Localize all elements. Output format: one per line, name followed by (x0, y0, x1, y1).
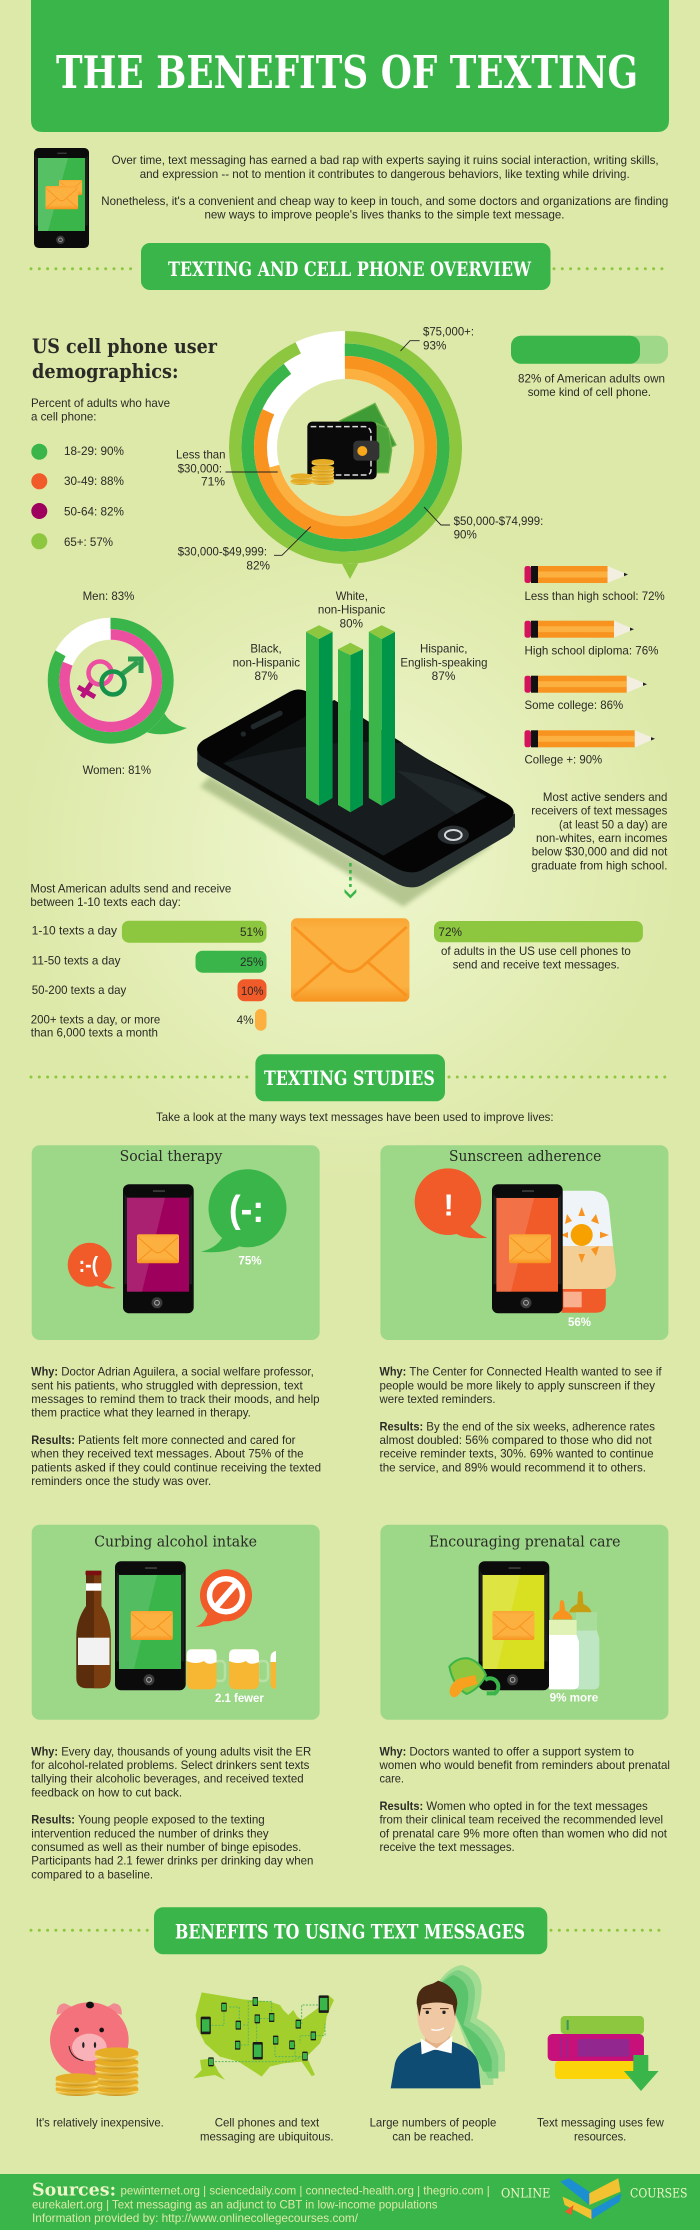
bar chart: texts per day: 4% (237, 1014, 254, 1027)
bar chart: texts per day: 25% (240, 956, 263, 969)
bar: 72% use texts: send and receive text messages. (453, 959, 620, 972)
legend: 18-29: 90% (64, 445, 124, 458)
title banner (31, 0, 669, 132)
callout: less than $30,000 (176, 448, 278, 489)
text: most adults send: Most American adults send and receive (30, 882, 231, 895)
caption: reach (370, 2117, 496, 2143)
text block: most active texters: non-whites, earn incomes (536, 832, 668, 845)
logo: online courses: COURSES (630, 2186, 688, 2201)
bar chart: texts per day: than 6,000 texts a month (31, 1027, 158, 1040)
section heading: benefits (154, 1907, 547, 1954)
sources text: pewinternet.org | sciencedaily.com | connected-health.org | thegrio.com | (120, 2185, 490, 2198)
panel: curbing alcohol intake: 2.1 fewer (215, 1692, 264, 1705)
pencil: high school diploma: High school diploma: 76% (524, 645, 658, 658)
panel: encouraging prenatal care (380, 1525, 668, 1720)
panel: sunscreen adherence: Sunscreen adherence (449, 1149, 601, 1165)
callout: $50,000-$74,999: $50,000-$74,999: (454, 515, 543, 528)
text: alcohol: consumed as well as their number of binge episodes. (31, 1841, 301, 1854)
label: white: White, (336, 590, 368, 603)
text: social therapy: them practice what they learned in therapy. (31, 1407, 251, 1420)
text: alcohol: intervention reduced the number of drinks they (31, 1827, 269, 1840)
caption: resources: resources. (574, 2130, 626, 2143)
caption: inexpensive: It's relatively inexpensive. (36, 2117, 164, 2130)
callout: $75,000+: $75,000+: (423, 326, 474, 339)
panel: encouraging prenatal care: 9% more (550, 1691, 599, 1704)
text: alcohol: for alcohol-related problems. Select drinkers sent texts (31, 1759, 310, 1772)
chart: income donut (235, 337, 456, 579)
text: alcohol (31, 1745, 313, 1881)
icon: large envelope (291, 918, 409, 1002)
caption: reach: Large numbers of people (370, 2117, 496, 2130)
text: sunscreen: receive reminder texts, 30%. 69% wanted to continue (380, 1448, 654, 1461)
icon: piggy bank (50, 2002, 138, 2096)
panel: social therapy: 75% (238, 1255, 262, 1268)
bar chart: texts per day: 11-50 texts a day (32, 955, 121, 968)
label: women: Women: 81% (83, 764, 151, 777)
panel: curbing alcohol intake: Curbing alcohol intake (94, 1535, 257, 1551)
text: sunscreen: The Center for Connected Health wanted to see if (409, 1366, 662, 1379)
text: alcohol: compared to a baseline. (31, 1868, 153, 1881)
panel: sunscreen adherence: 56% (568, 1316, 591, 1329)
heading: demographics: demographics: (32, 360, 178, 383)
legend: 50-64: 82% (64, 506, 124, 519)
text: social therapy: Patients felt more connected and cared for (78, 1434, 296, 1447)
heading: demographics (32, 335, 218, 383)
caption: resources (537, 2117, 664, 2143)
text block: most active texters: (at least 50 a day) are (559, 818, 667, 831)
text: prenatal: of prenatal care 9% more often than women who did not (380, 1827, 668, 1840)
arrow: phone to envelope (344, 863, 356, 898)
bar chart: texts per day: 50-200 texts a day (32, 984, 126, 997)
bar: 72% use texts: of adults in the US use cell phones to (441, 945, 631, 958)
demographics intro: a cell phone: (31, 411, 96, 424)
text: prenatal: receive the text messages. (380, 1841, 515, 1854)
pencil: high school diploma (524, 621, 658, 658)
text: social therapy: Results: (31, 1434, 75, 1447)
label: hispanic: English-speaking (400, 656, 488, 669)
text: sunscreen: people would be more likely to apply sunscreen if they (380, 1379, 655, 1392)
text: social therapy: Why: (31, 1366, 58, 1379)
intro text: and expression -- not to mention it contributes to dangerous behaviors, like texting while driving. (140, 168, 630, 181)
section heading: texting studies: TEXTING STUDIES (264, 1067, 435, 1090)
bar: 82% own cell phone: 82% of American adults own (518, 372, 665, 385)
label: men: Men: 83% (83, 590, 134, 603)
bar chart: texts per day: 51% (240, 926, 263, 939)
text: social therapy: messages to remind them to track their moods, and help (31, 1393, 320, 1406)
bar: 82% own cell phone: some kind of cell phone. (528, 386, 651, 399)
icon: no drinking bubble (196, 1569, 252, 1627)
bar: 72% use texts (434, 921, 643, 972)
section heading: overview: TEXTING AND CELL PHONE OVERVIEW (168, 258, 532, 281)
text: prenatal: Results: (380, 1800, 423, 1813)
pencil: less than high school (524, 566, 665, 603)
text: prenatal (379, 1745, 670, 1854)
label: black: 87% (254, 670, 278, 683)
pencil: some college: Some college: 86% (524, 699, 623, 712)
text: social therapy: sent his patients, who struggled with depression, text (31, 1379, 303, 1392)
icon: books with down arrow (548, 2016, 659, 2091)
icon: bottle (76, 1571, 111, 1688)
heading: demographics: US cell phone user (32, 335, 218, 358)
icon: sad bubble: :-( (79, 1252, 99, 1277)
callout: $30,000-$49,999: $30,000-$49,999: (178, 546, 267, 559)
icon: baby bottles and pacifier (449, 1591, 599, 1697)
intro text (101, 154, 668, 222)
text: sunscreen: By the end of the six weeks, adherence rates (426, 1420, 655, 1433)
legend: 65+: 57% (64, 536, 113, 549)
label: black: non-Hispanic (233, 656, 300, 669)
text: sunscreen (379, 1366, 662, 1474)
pencil: less than high school: Less than high school: 72% (524, 590, 665, 603)
text: most adults send (30, 882, 231, 909)
label: hispanic (400, 643, 488, 683)
icon: happy bubble: (-: (229, 1189, 264, 1231)
callout: $30,000-$49,999: 82% (246, 559, 270, 572)
sources text: Information provided by: http://www.onlinecollegecourses.com/ (32, 2212, 359, 2225)
caption: reach: can be reached. (392, 2130, 474, 2143)
pencil: college plus (524, 730, 655, 767)
text: social therapy: Doctor Adrian Aguilera, a social welfare professor, (61, 1366, 314, 1379)
bar: 82% own cell phone (511, 336, 668, 399)
caption: resources: Text messaging uses few (537, 2117, 664, 2130)
callout: $75,000+ (400, 326, 474, 352)
studies intro: Take a look at the many ways text messages have been used to improve lives: (156, 1111, 554, 1124)
footer (0, 2174, 700, 2230)
text: social therapy (30, 1366, 321, 1488)
intro text: Nonetheless, it's a convenient and cheap way to keep in touch, and some doctors and organizations are finding (101, 195, 668, 208)
bar chart: texts per day: 10% (241, 985, 263, 998)
text: prenatal: Doctors wanted to offer a support system to (409, 1745, 634, 1758)
large phone (197, 690, 515, 907)
legend (31, 444, 124, 549)
bar chart: texts per day: 1-10 texts a day (32, 924, 117, 937)
demographics intro (31, 397, 170, 424)
caption: ubiquitous (200, 2117, 334, 2143)
text: alcohol: tallying their alcoholic beverages, and received texted (31, 1773, 304, 1786)
icon: phone with envelope (123, 1184, 194, 1313)
sources text: eurekalert.org | Text messaging as an adjunct to CBT in low-income populations (32, 2198, 438, 2211)
caption: ubiquitous: Cell phones and text (215, 2117, 320, 2130)
text: sunscreen: Results: (380, 1420, 423, 1433)
logo: online courses: ONLINE (501, 2186, 550, 2201)
label: white: 80% (340, 617, 363, 630)
text: prenatal: Why: (380, 1745, 406, 1758)
text: alcohol: Why: (31, 1745, 58, 1758)
label: black: Black, (250, 643, 282, 656)
icon: wallet with money and coins (291, 403, 396, 485)
icon: gender symbols (78, 659, 141, 697)
bar: 72% use texts: 72% (438, 926, 462, 939)
text: prenatal: care. (380, 1773, 404, 1786)
panel: encouraging prenatal care: Encouraging prenatal care (429, 1535, 620, 1551)
legend: 30-49: 88% (64, 475, 124, 488)
sources heading: Sources: (32, 2180, 116, 2201)
text block: most active texters (531, 791, 668, 872)
label: hispanic: 87% (432, 670, 455, 683)
panel: sunscreen adherence (380, 1145, 668, 1340)
text: alcohol: Results: (31, 1814, 75, 1827)
text: prenatal: from their clinical team received the recommended level (380, 1814, 663, 1827)
callout: less than $30,000: Less than (176, 448, 226, 461)
text: prenatal: women who would benefit from reminders about prenatal (379, 1759, 670, 1772)
text: social therapy: reminders once the study was over. (31, 1475, 211, 1488)
text: alcohol: Participants had 2.1 fewer drinks per drinking day when (31, 1855, 313, 1868)
text: prenatal: Women who opted in for the text messages (426, 1800, 648, 1813)
icon: phone with envelope (115, 1561, 186, 1690)
icon: alert bubble (415, 1168, 488, 1238)
label: black (233, 643, 300, 683)
pencil: some college (524, 676, 647, 712)
icon: happy bubble (201, 1169, 286, 1252)
text: alcohol: feedback on how to cut back. (31, 1786, 182, 1799)
sources text (32, 2185, 490, 2225)
text: sunscreen: were texted reminders. (379, 1393, 496, 1406)
intro text: Over time, text messaging has earned a bad rap with experts saying it ruins social interaction, writing skills, (112, 154, 659, 167)
callout: $50,000-$74,999: 90% (454, 529, 477, 542)
callout: $50,000-$74,999 (424, 507, 543, 542)
text: alcohol: Young people exposed to the texting (78, 1814, 265, 1827)
label: hispanic: Hispanic, (420, 643, 467, 656)
logo: online courses (501, 2178, 688, 2219)
callout: $30,000-$49,999 (178, 527, 311, 572)
icon: phone with envelopes (34, 148, 89, 248)
section heading: benefits: BENEFITS TO USING TEXT MESSAGES (175, 1920, 525, 1943)
text: most adults send: between 1-10 texts each day: (30, 896, 181, 909)
panel: social therapy (32, 1145, 320, 1340)
text block: most active texters: Most active senders and (543, 791, 667, 804)
icon: phone with envelope (479, 1561, 549, 1690)
text: sunscreen: Why: (380, 1366, 406, 1379)
icon: sunscreen bottle (561, 1191, 616, 1313)
text: social therapy: patients asked if they could continue receiving the texted (31, 1461, 321, 1474)
bar chart: texts per day (31, 921, 266, 1040)
callout: less than $30,000: $30,000: (178, 462, 222, 475)
text: sunscreen: the service, and 89% would recommend it to others. (380, 1461, 646, 1474)
text: alcohol: Every day, thousands of young adults visit the ER (61, 1745, 311, 1758)
label: white: non-Hispanic (318, 604, 385, 617)
pencil: college plus: College +: 90% (524, 754, 602, 767)
icon: person with layered shadows (391, 1965, 505, 2088)
chart: gender donut (53, 624, 187, 738)
caption: ubiquitous: messaging are ubiquitous. (200, 2130, 334, 2143)
bar chart: texts per day: 200+ texts a day, or more (31, 1013, 160, 1026)
icon: beer mugs (187, 1649, 276, 1689)
text block: most active texters: below $30,000 and did not (532, 846, 668, 859)
callout: less than $30,000: 71% (201, 476, 225, 489)
chart: ethnicity 3D bars (306, 625, 395, 812)
icon: US map with phones (193, 1992, 334, 2080)
section heading: overview (141, 243, 550, 290)
text block: most active texters: receivers of text messages (531, 805, 668, 818)
text block: most active texters: graduate from high school. (531, 859, 667, 872)
intro text: new ways to improve people's lives thanks to the simple text message. (204, 208, 564, 222)
callout: $75,000+: 93% (423, 339, 446, 352)
demographics intro: Percent of adults who have (31, 397, 170, 410)
icon: alert bubble: ! (444, 1188, 454, 1222)
icon: sad bubble (68, 1243, 116, 1288)
icon: phone with envelope (492, 1184, 563, 1313)
panel: curbing alcohol intake (32, 1525, 320, 1720)
text: sunscreen: almost doubled: 56% compared to those who did not (380, 1434, 653, 1447)
label: white (318, 590, 385, 630)
text: social therapy: when they received text messages. About 75% of the (30, 1448, 304, 1461)
section heading: texting studies (255, 1054, 445, 1101)
panel: social therapy: Social therapy (120, 1149, 223, 1165)
